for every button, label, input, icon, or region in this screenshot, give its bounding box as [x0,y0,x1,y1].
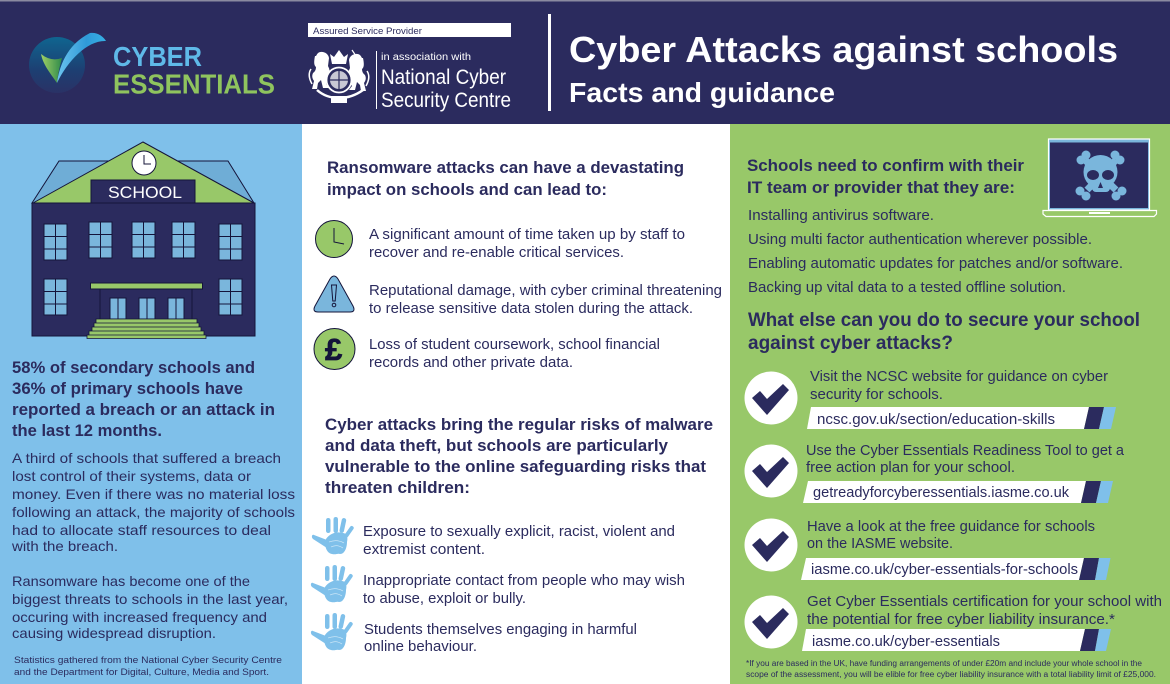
text: source note [14,655,282,678]
text: ransomware: Ransomware has become one of the [12,573,250,589]
text: key statistic: the last 12 months. [12,422,162,440]
panel: guidance (right) [730,124,1170,684]
link bar: iasme.co.uk/cyber-essentials-for-schools [811,562,1078,578]
impact: time: recover and re-enable critical services. [369,245,624,261]
heading: confirm with IT team: IT team or provider that they are: [747,178,1015,197]
heading: confirm with IT team [747,156,1024,197]
footnote: *If you are based in the UK, have funding arrangements of under £20m and include your whole school in the [746,659,1143,668]
heading: what else: What else can you do to secure your school [748,310,1140,331]
icon: warning triangle [314,276,354,312]
link bar: iasme.co.uk/cyber-essentials [812,634,1000,650]
action: Readiness Tool [744,443,1125,503]
icon: pound sign [314,328,355,370]
heading: online safeguarding [325,415,713,497]
impact: financial: Loss of student coursework, school financial [369,337,660,353]
checklist: Installing antivirus software. [748,208,934,224]
link bar [803,481,1113,503]
logo: Cyber Essentials: CYBER [113,41,202,72]
icon: hand [312,517,354,554]
text: ransomware: biggest threats to schools in the last year, [12,591,288,607]
risk: behaviour: Students themselves engaging in harmful [364,622,637,638]
action: IASME guidance: Have a look at the free guidance for schools [807,519,1095,535]
impact: reputation [314,276,722,317]
action: NCSC [744,369,1116,429]
link bar [807,407,1116,429]
icon: clock [316,220,352,258]
icon: pound sign: £ [325,332,342,367]
checklist: Backing up vital data to a tested offline solution. [748,280,1066,296]
heading: online safeguarding: Cyber attacks bring the regular risks of malware [325,415,713,434]
risk: behaviour: online behaviour. [364,639,477,655]
icon: tick [744,372,798,424]
text: key statistic: 58% of secondary schools and [12,359,255,377]
text: breach details: lost control of their systems, data or [12,468,251,484]
title block: Cyber Attacks against schools [569,29,1118,70]
heading: ransomware impact [327,158,684,199]
heading: online safeguarding: vulnerable to the online safeguarding risks that [325,457,706,476]
heading: what else: against cyber attacks? [748,333,953,354]
checklist [748,208,1123,296]
text: source note: and the Department for Digital, Culture, Media and Sport. [14,667,269,678]
icon: hand [311,565,353,602]
logo: National Cyber Security Centre [308,23,511,112]
footnote: scope of the assessment, you will be elible for free cyber liability insurance with a total liability limit of £25,000. [746,670,1156,679]
checklist: Enabling automatic updates for patches and/or software. [748,256,1123,272]
risk: exposure: Exposure to sexually explicit, racist, violent and [363,524,675,540]
action: certification [744,594,1162,651]
logo: National Cyber Security Centre: Assured Service Provider [313,26,422,37]
impact: time: A significant amount of time taken up by staff to [369,227,685,243]
text: breach details: following an attack, the majority of schools [12,504,295,520]
action: Readiness Tool: Use the Cyber Essentials Readiness Tool to get a [806,443,1125,459]
logo: Cyber Essentials [29,33,275,100]
link bar: getreadyforcyberessentials.iasme.co.uk [813,485,1070,501]
text: key statistic: 36% of primary schools have [12,380,243,398]
action: IASME guidance: on the IASME website. [807,536,953,552]
risk: exposure: extremist content. [363,542,485,558]
icon: hand [311,613,353,650]
action: certification: the potential for free cyber liability insurance.* [807,612,1115,628]
risk: exposure [312,517,675,558]
icon: laptop with skull [1043,139,1156,216]
text: ransomware: causing widespread disruption. [12,625,216,641]
logo: National Cyber Security Centre: Security Centre [381,89,511,112]
action: IASME guidance [744,518,1110,580]
impact: financial: records and other private data. [369,355,573,371]
panel: impacts and risks (centre) [302,124,730,684]
title block: Facts and guidance [569,77,835,108]
action: NCSC: Visit the NCSC website for guidance on cyber [810,369,1108,385]
panel: statistics (left) [0,124,302,684]
impact: reputation: Reputational damage, with cyber criminal threatening [369,283,722,299]
risk: contact: to abuse, exploit or bully. [363,591,526,607]
illustration: school building: SCHOOL [108,183,182,202]
text: ransomware: occuring with increased frequency and [12,609,267,625]
text: source note: Statistics gathered from the National Cyber Security Centre [14,655,282,666]
icon: royal crest [309,50,369,103]
impact: time [316,220,685,261]
action: NCSC: security for schools. [810,387,943,403]
heading: online safeguarding: and data theft, but schools are particularly [325,436,669,455]
logo: National Cyber Security Centre: National Cyber [381,66,506,89]
link bar [801,558,1110,580]
title block [548,14,1118,111]
icon: tick [744,444,798,498]
icon: tick [744,518,798,572]
heading: ransomware impact: Ransomware attacks can have a devastating [327,158,684,177]
heading: online safeguarding: threaten children: [325,478,470,497]
text: ransomware [12,573,288,641]
link bar: ncsc.gov.uk/section/education-skills [817,412,1055,428]
impact: financial [314,328,660,371]
text: breach details: had to allocate staff resources to deal [12,522,271,538]
heading: what else [748,310,1140,354]
text: key statistic: reported a breach or an attack in [12,401,275,419]
logo: National Cyber Security Centre: in association with [381,52,471,63]
risk: contact: Inappropriate contact from people who may wish [363,573,685,589]
checklist: Using multi factor authentication wherever possible. [748,232,1092,248]
text: breach details: money. Even if there was no material loss [12,486,295,502]
link bar [802,629,1111,651]
header band [0,0,1170,124]
icon: tick [744,596,798,648]
illustration: school building [32,142,255,338]
text: breach details [11,450,295,554]
text: breach details: A third of schools that suffered a breach [12,450,281,466]
text: breach details: with the breach. [11,538,118,554]
risk: behaviour [311,613,637,655]
heading: ransomware impact: impact on schools and can lead to: [327,180,607,199]
text: key statistic [12,359,275,440]
action: certification: Get Cyber Essentials certification for your school with [807,594,1162,610]
action: Readiness Tool: free action plan for your school. [806,460,1015,476]
heading: confirm with IT team: Schools need to confirm with their [747,156,1024,175]
footnote [746,659,1156,679]
impact: reputation: to release sensitive data stolen during the attack. [369,301,693,317]
risk: contact [311,565,685,607]
logo: Cyber Essentials: ESSENTIALS [113,68,275,100]
